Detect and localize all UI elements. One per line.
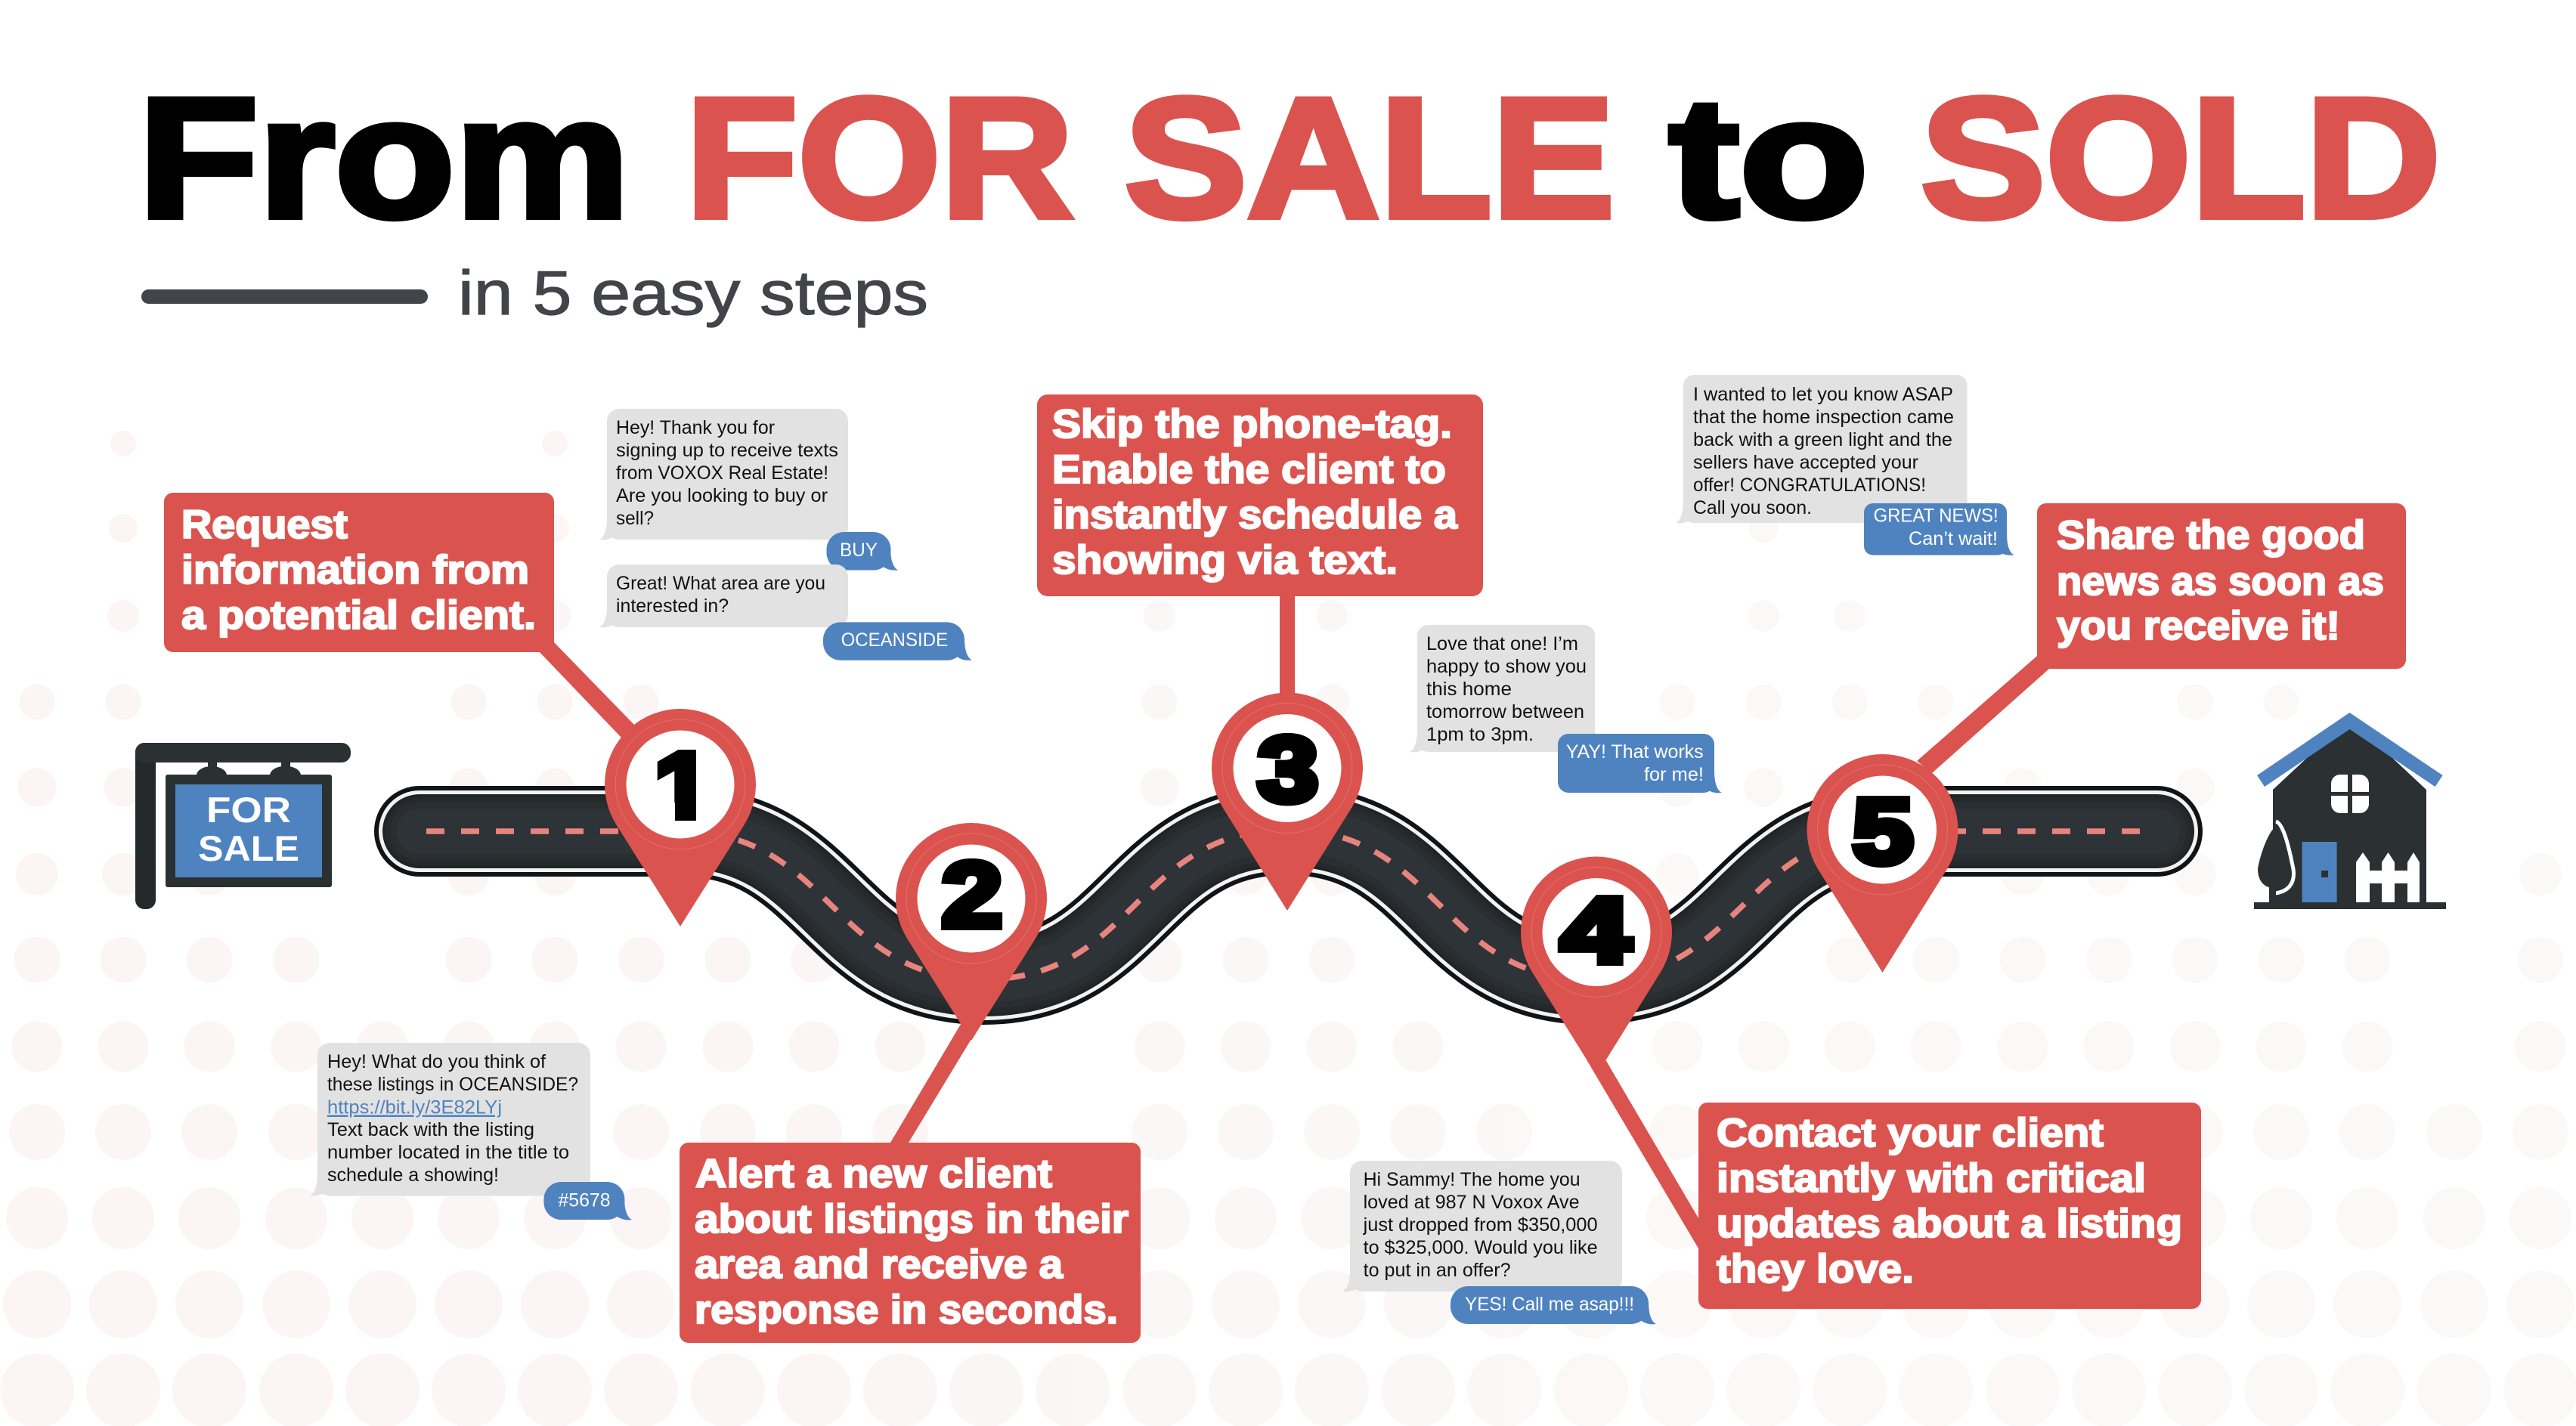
chat: step 2 message: number located in the title to: [327, 1142, 569, 1163]
roof: [2257, 713, 2443, 787]
heading text 3: Enable the client to: [1052, 447, 1446, 492]
chat: YES reply: [1451, 1286, 1656, 1324]
chat: step 5 message: that the home inspection came: [1693, 407, 1954, 428]
chat: step 1 message one: [599, 409, 848, 540]
chat: step 4 message: loved at 987 N Voxox Ave: [1364, 1192, 1580, 1213]
pin 4: 4: [1561, 879, 1630, 982]
icon: house: [2254, 713, 2446, 909]
road: [420, 830, 2157, 979]
connector 1: [539, 642, 635, 738]
heading box 2: [680, 1143, 1141, 1343]
pin 3: [1212, 693, 1363, 911]
chat: step 5 message: I wanted to let you know ASAP: [1693, 384, 1953, 405]
heading text 1: information from: [181, 548, 529, 592]
chat: OCEANSIDE reply: [823, 622, 972, 660]
chat: BUY reply: [827, 532, 898, 571]
chat: BUY reply: BUY: [840, 540, 878, 561]
heading box 1: [164, 493, 554, 652]
chat: step 2 message: https://bit.ly/3E82LYj: [327, 1097, 502, 1118]
heading text 1: [181, 503, 536, 638]
tree: [2258, 821, 2293, 904]
door: [2302, 842, 2337, 902]
chat: YES reply: YES! Call me asap!!!: [1465, 1294, 1634, 1315]
chat: step 4 message: to put in an offer?: [1364, 1260, 1511, 1281]
chat: step 1 message one: sell?: [616, 508, 654, 529]
heading box 4: [1698, 1103, 2201, 1309]
chat: step 3 message: Love that one! I’m: [1426, 633, 1578, 654]
chat: step 4 message: just dropped from $350,000: [1363, 1214, 1598, 1236]
heading text 3: instantly schedule a: [1052, 493, 1458, 537]
title: to: [1669, 62, 1869, 253]
chat: step 4 message: to $325,000. Would you like: [1364, 1237, 1598, 1258]
panel: step 2: [680, 823, 1141, 1343]
heading box 3: [1037, 394, 1483, 596]
heading text 4: Contact your client: [1717, 1111, 2104, 1155]
chat: step 2 message: schedule a showing!: [327, 1165, 499, 1186]
panel: step 4: [1521, 857, 2201, 1309]
chat: GREAT NEWS reply: Can’t wait!: [1909, 528, 1998, 549]
title: [138, 62, 2441, 253]
heading text 3: Skip the phone-tag.: [1052, 402, 1452, 447]
pin 4: [1521, 857, 1672, 1075]
heading box 5: [2037, 503, 2406, 669]
heading text 1: a potential client.: [181, 593, 536, 638]
chat: step 3 message: tomorrow between: [1426, 701, 1584, 722]
chat: step 4 message: Hi Sammy! The home you: [1364, 1169, 1581, 1190]
chat: step 5 message: sellers have accepted your: [1693, 452, 1918, 473]
heading text 2: [695, 1152, 1129, 1332]
heading text 2: area and receive a: [695, 1242, 1064, 1287]
pin 5: 5: [1853, 780, 1913, 883]
chat: step 3 message: 1pm to 3pm.: [1426, 724, 1534, 745]
heading text 5: Share the good: [2057, 513, 2365, 558]
pin 1: 1: [655, 734, 712, 837]
chat: OCEANSIDE reply: OCEANSIDE: [841, 629, 948, 651]
title: SOLD: [1921, 62, 2441, 253]
heading text 4: instantly with critical: [1717, 1156, 2146, 1201]
chat: step 2 message: these listings in OCEANSIDE?: [327, 1074, 578, 1095]
chat: GREAT NEWS reply: GREAT NEWS!: [1874, 506, 1999, 527]
sign text: [198, 790, 299, 868]
chat: step 4 message: [1342, 1161, 1622, 1291]
chat: step 2 message: [310, 1043, 590, 1196]
panel: step 1: [164, 493, 756, 926]
chat: #5678 reply: [543, 1182, 632, 1220]
chat: step 3 message: happy to show you: [1426, 656, 1587, 677]
title: FOR SALE: [686, 62, 1615, 253]
chat: step 5 message: offer! CONGRATULATIONS!: [1693, 475, 1926, 496]
heading text 2: about listings in their: [695, 1197, 1129, 1242]
heading text 2: Alert a new client: [695, 1152, 1052, 1196]
chat: step 1 message one: Are you looking to buy or: [616, 485, 828, 506]
chat: #5678 reply: #5678: [558, 1189, 611, 1211]
heading text 5: you receive it!: [2057, 604, 2340, 648]
chat: step 3 message: [1410, 625, 1595, 752]
pin 1: [605, 709, 756, 926]
chat: step 1 message one: from VOXOX Real Estate!: [616, 462, 828, 484]
connector 5: [1917, 656, 2049, 773]
heading text 5: news as soon as: [2057, 559, 2384, 604]
chat: YAY reply: for me!: [1644, 764, 1704, 785]
heading text 3: showing via text.: [1052, 538, 1398, 583]
chat: step 1 message two: interested in?: [616, 595, 729, 617]
heading text 1: Request: [181, 503, 348, 547]
sign text: SALE: [198, 828, 299, 868]
fence: [2356, 852, 2420, 902]
heading text 4: [1717, 1111, 2182, 1291]
heading text 4: updates about a listing: [1717, 1202, 2182, 1246]
chat: step 5 message: Call you soon.: [1693, 497, 1812, 518]
pin 2: [896, 823, 1047, 1041]
connector 2: [890, 1022, 982, 1143]
chat: YAY reply: [1558, 734, 1722, 793]
window: [2331, 775, 2369, 813]
title: From: [138, 62, 630, 253]
chat: GREAT NEWS reply: [1864, 503, 2014, 555]
connector 4: [1587, 1060, 1701, 1248]
heading text 3: [1052, 402, 1458, 583]
chat: step 5 message: [1676, 375, 1967, 523]
icon: for sale sign: [135, 743, 351, 909]
chat: step 1 message two: Great! What area are you: [616, 573, 825, 594]
chat: step 2 message: Hey! What do you think of: [327, 1051, 546, 1072]
chat: step 1 message one: signing up to receive texts: [616, 440, 838, 461]
chat: step 1 message two: [599, 565, 848, 627]
chat: step 3 message: this home: [1426, 679, 1512, 700]
pin 5: [1807, 754, 1958, 973]
sign text: FOR: [206, 790, 291, 830]
chat: step 5 message: back with a green light and the: [1693, 429, 1952, 450]
pin 2: 2: [942, 843, 1002, 946]
heading text 5: [2057, 513, 2384, 648]
heading text 4: they love.: [1717, 1247, 1914, 1291]
connector 3: [1280, 593, 1295, 699]
chat: step 2 message: Text back with the listing: [327, 1119, 534, 1140]
panel: step 3: [1037, 394, 1483, 911]
subtitle rule: [141, 289, 428, 304]
subtitle: in 5 easy steps: [458, 258, 928, 328]
heading text 2: response in seconds.: [695, 1288, 1118, 1332]
chat: step 1 message one: Hey! Thank you for: [616, 417, 775, 438]
panel: step 5: [1807, 503, 2406, 973]
chat: YAY reply: YAY! That works: [1566, 741, 1704, 762]
pin 3: 3: [1258, 718, 1318, 821]
